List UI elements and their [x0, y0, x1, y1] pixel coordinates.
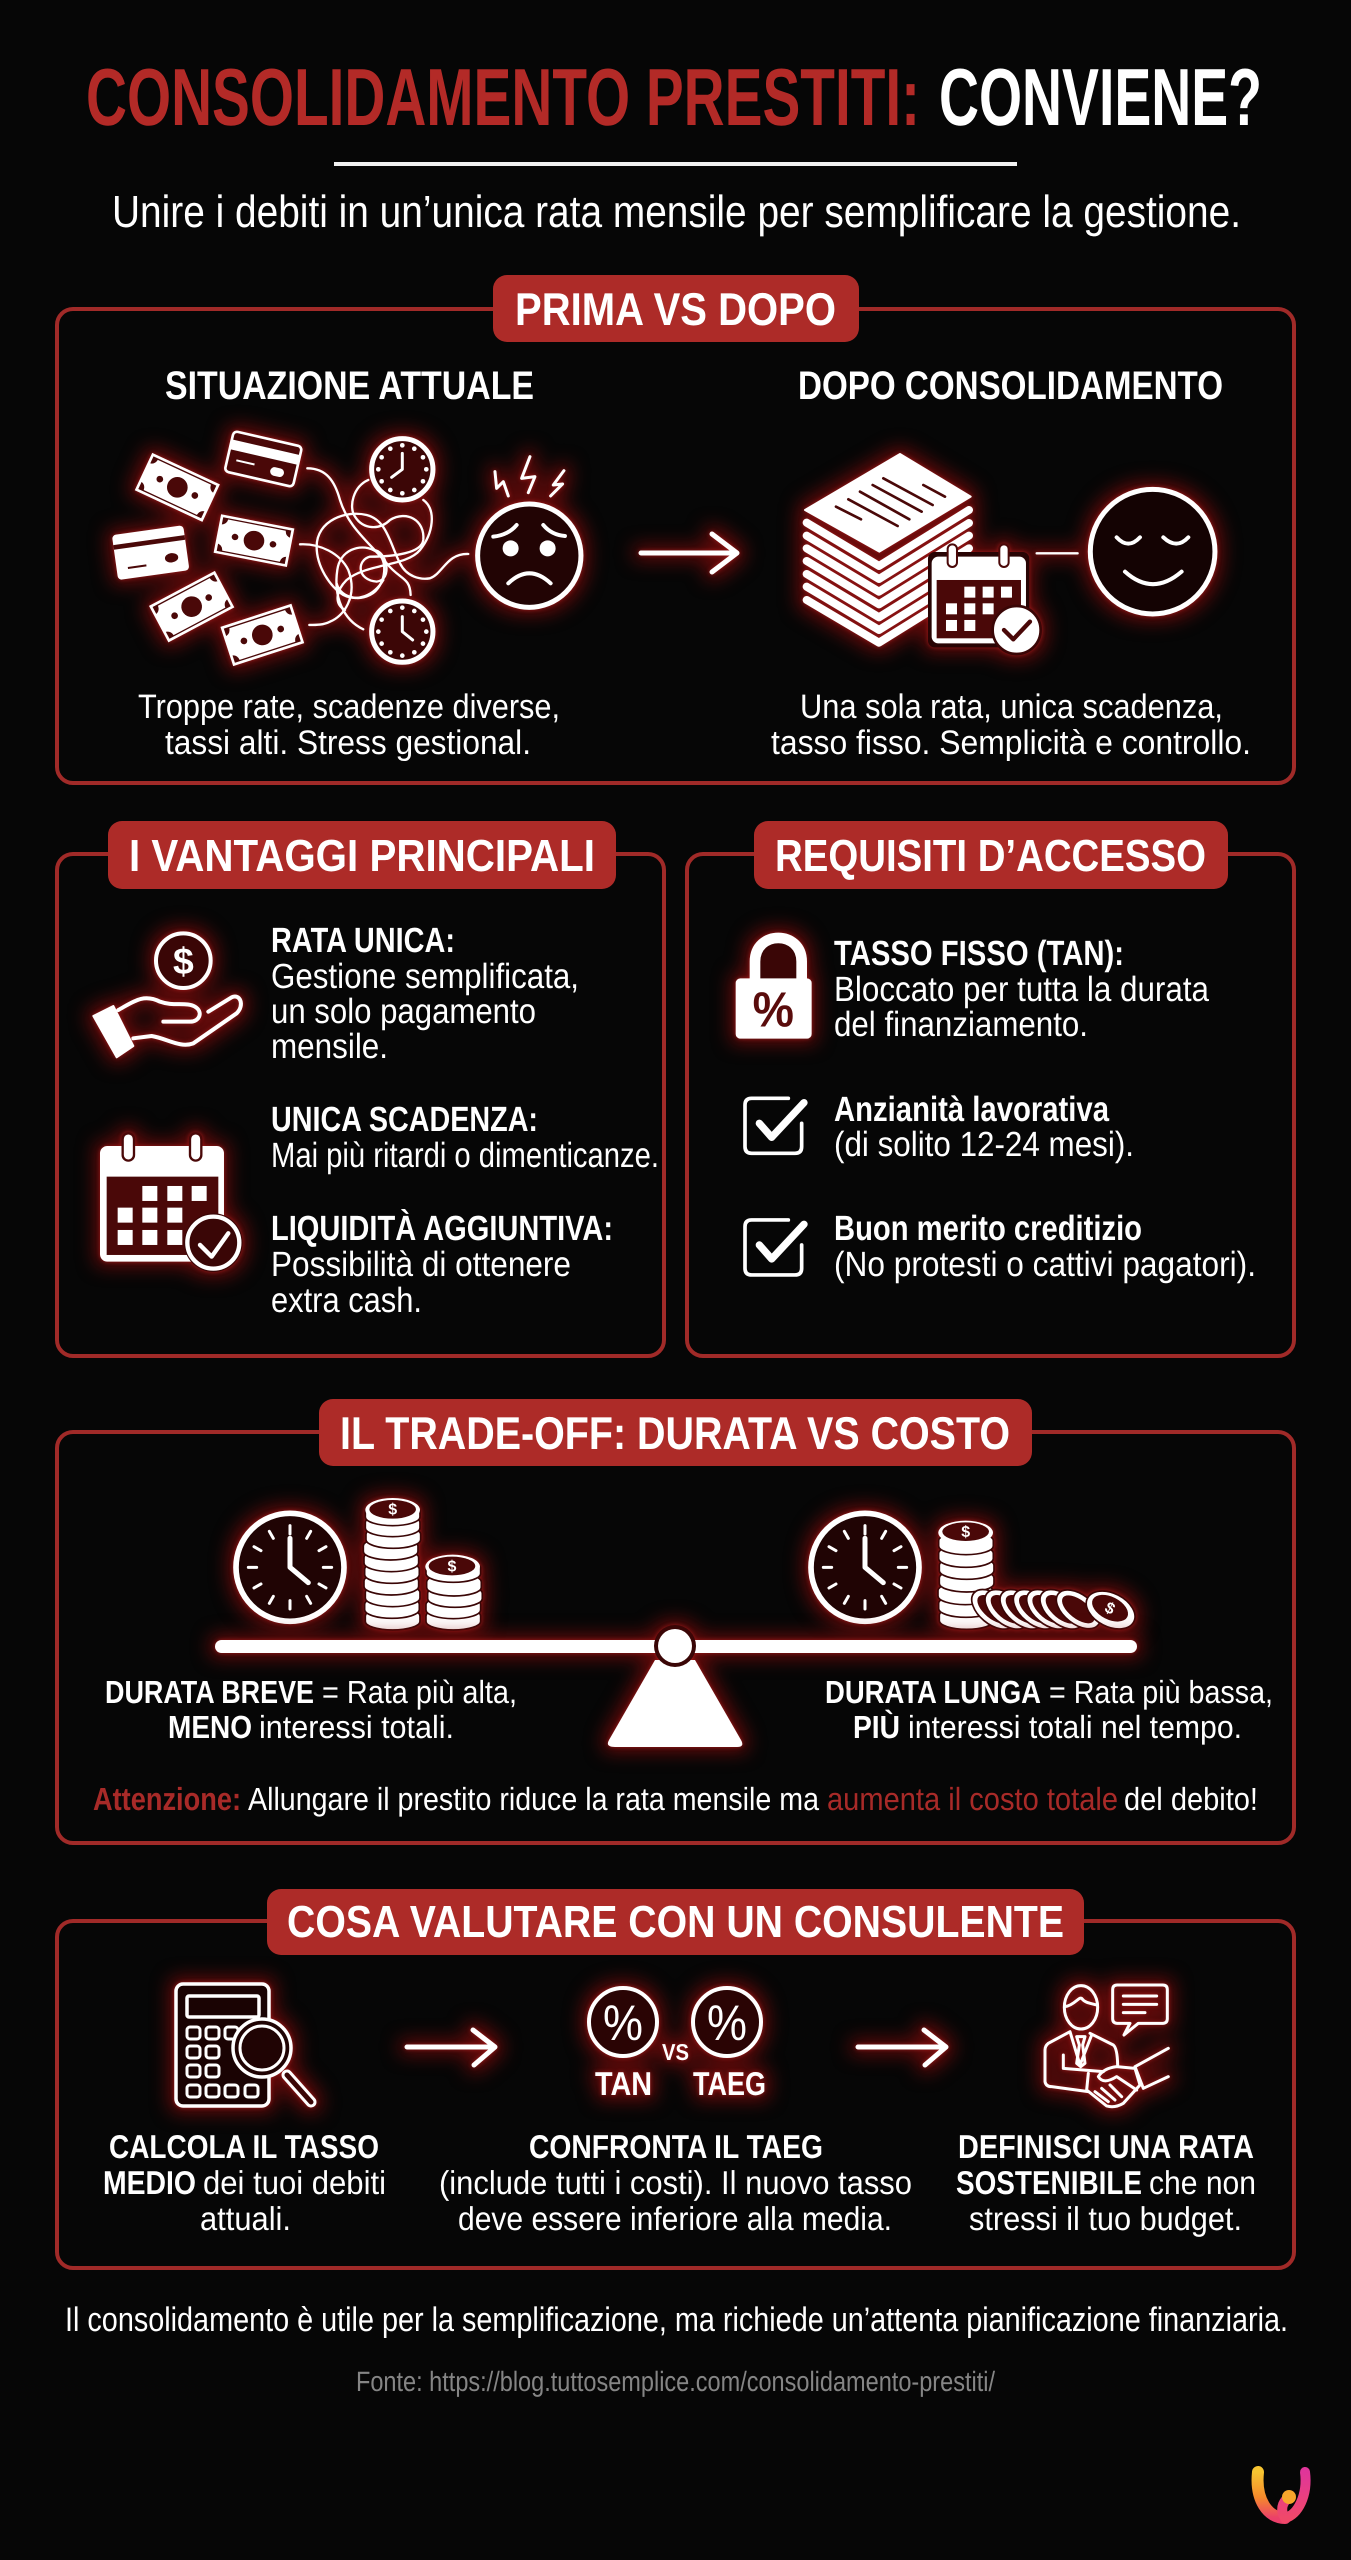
source: Fonte: https://blog.tuttosemplice.com/consolidamento-prestiti/ — [356, 2366, 995, 2397]
callout: attenzione: aumenta il costo totale — [827, 1781, 1118, 1817]
text: tasso fisso: Bloccato per tutta la durata — [834, 970, 1209, 1009]
panel: prima vs dopo — [57, 275, 1294, 783]
heading: requisiti — [754, 821, 1228, 889]
icon: logo — [1258, 2472, 1306, 2518]
heading: prima vs dopo: PRIMA VS DOPO — [515, 283, 836, 335]
icon: padlock with percent — [736, 938, 812, 1039]
icon: clock and tall coin stacks — [236, 1498, 482, 1630]
panel: vantaggi principali — [57, 821, 664, 1356]
text: durata breve: interessi totali. — [259, 1709, 454, 1745]
text: durata lunga — [825, 1674, 1273, 1745]
text: dopo consolidamento: tasso fisso. Semplicità e controllo. — [771, 724, 1251, 762]
text: definisci una rata sostenibile: SOSTENIBILE — [956, 2164, 1142, 2201]
text: situazione attuale — [138, 688, 560, 762]
icon: clock and toppled coins — [811, 1513, 1141, 1637]
text: definisci una rata sostenibile: DEFINISCI UNA RATA — [958, 2128, 1254, 2165]
panel: requisiti d'accesso — [687, 821, 1294, 1356]
text: anzianità lavorativa: (di solito 12-24 mesi). — [834, 1125, 1134, 1164]
text: calcola il tasso medio — [103, 2128, 386, 2237]
text: rata unica: Gestione semplificata, — [271, 957, 579, 996]
text: durata lunga: DURATA LUNGA — [825, 1674, 1041, 1710]
text: definisci una rata sostenibile — [956, 2128, 1256, 2237]
icon: calculator with magnifier — [176, 1984, 311, 2106]
icon: checkbox — [745, 1220, 804, 1275]
text: situazione attuale: Troppe rate, scadenze diverse, — [138, 688, 560, 726]
text: tasso fisso: del finanziamento. — [834, 1005, 1088, 1044]
text: confronta il taeg: (include tutti i costi). Il nuovo tasso — [439, 2164, 912, 2201]
text: liquidità aggiuntiva: extra cash. — [271, 1281, 422, 1320]
text: durata breve: = Rata più alta, — [322, 1674, 517, 1710]
text: durata breve: MENO — [168, 1709, 252, 1745]
text: liquidità aggiuntiva — [271, 1208, 613, 1320]
icon: clock and tall coin stacks: $ — [388, 1501, 397, 1518]
heading: trade-off — [319, 1399, 1032, 1466]
icon: checkbox — [745, 1098, 804, 1153]
arrow — [407, 2030, 495, 2065]
text: situazione attuale: tassi alti. Stress gestional. — [165, 724, 531, 762]
subheading: situazione attuale: SITUAZIONE ATTUALE — [165, 364, 534, 408]
heading: vantaggi: I VANTAGGI PRINCIPALI — [129, 830, 595, 881]
icon: tan vs taeg: TAEG — [693, 2065, 766, 2102]
text: durata breve: DURATA BREVE — [105, 1674, 314, 1710]
text: confronta il taeg: deve essere inferiore alla media. — [458, 2200, 892, 2237]
title: CONSOLIDAMENTO PRESTITI: — [86, 53, 920, 143]
text: anzianità lavorativa: Anzianità lavorativa — [834, 1090, 1109, 1129]
heading: vantaggi — [108, 821, 616, 889]
text: buon merito creditizio: (No protesti o cattivi pagatori). — [834, 1245, 1256, 1284]
text: unica scadenza: UNICA SCADENZA: — [271, 1100, 538, 1139]
text: dopo consolidamento: Una sola rata, unica scadenza, — [800, 688, 1223, 726]
icon: padlock with percent: % — [753, 982, 794, 1037]
icon: balance beam and fulcrum — [215, 1625, 1137, 1747]
icon: tan vs taeg — [589, 1988, 766, 2102]
text: liquidità aggiuntiva: Possibilità di ottenere — [271, 1245, 571, 1284]
heading: consulente: COSA VALUTARE CON UN CONSULENTE — [287, 1896, 1064, 1947]
callout: attenzione: Attenzione: — [93, 1781, 241, 1817]
text: calcola il tasso medio: dei tuoi debiti — [203, 2164, 386, 2201]
text: calcola il tasso medio: attuali. — [200, 2200, 291, 2237]
text: rata unica: un solo pagamento — [271, 992, 536, 1031]
icon: tan vs taeg: VS — [662, 2039, 689, 2065]
text: unica scadenza — [271, 1100, 659, 1175]
icon: tan vs taeg: % — [707, 1995, 747, 2051]
heading: requisiti: REQUISITI D’ACCESSO — [775, 830, 1206, 881]
text: anzianità lavorativa — [834, 1090, 1134, 1164]
text: definisci una rata sostenibile: che non — [1149, 2164, 1256, 2201]
text: definisci una rata sostenibile: stressi il tuo budget. — [969, 2200, 1242, 2237]
text: durata lunga: PIÙ — [853, 1709, 900, 1745]
icon: bills, cards, clocks and tangle leading to stressed face — [112, 431, 581, 666]
text: buon merito creditizio: Buon merito creditizio — [834, 1209, 1142, 1248]
text: tasso fisso — [834, 934, 1209, 1044]
panel: trade-off — [57, 1399, 1294, 1843]
text: rata unica: mensile. — [271, 1027, 388, 1066]
text: confronta il taeg — [439, 2128, 912, 2237]
icon: clock and toppled coins: $ — [1102, 1598, 1118, 1618]
callout: attenzione: del debito! — [1124, 1781, 1258, 1817]
subheading: dopo consolidamento: DOPO CONSOLIDAMENTO — [798, 364, 1223, 408]
heading: trade-off: IL TRADE-OFF: DURATA VS COSTO — [340, 1407, 1010, 1459]
text: calcola il tasso medio: CALCOLA IL TASSO — [109, 2128, 379, 2165]
text: liquidità aggiuntiva: LIQUIDITÀ AGGIUNTIVA: — [271, 1208, 613, 1248]
callout: attenzione — [93, 1781, 1258, 1817]
icon: paper stack with calendar and calm face — [805, 454, 1215, 654]
arrow — [641, 534, 737, 572]
text: durata breve — [105, 1674, 517, 1745]
text: durata lunga: = Rata più bassa, — [1049, 1674, 1273, 1710]
heading: prima vs dopo — [493, 275, 859, 342]
icon: hand with coin — [93, 933, 241, 1057]
arrow — [858, 2030, 946, 2065]
text: dopo consolidamento — [771, 688, 1251, 762]
text: durata lunga: interessi totali nel tempo. — [908, 1709, 1242, 1745]
text: rata unica: RATA UNICA: — [271, 921, 455, 960]
panel: cosa valutare con un consulente — [57, 1889, 1294, 2268]
text: rata unica — [271, 921, 579, 1066]
text: calcola il tasso medio: MEDIO — [103, 2164, 196, 2201]
icon: calendar with check — [100, 1133, 243, 1272]
icon: clock and tall coin stacks: $ — [448, 1557, 457, 1575]
text: unica scadenza: Mai più ritardi o dimenticanze. — [271, 1136, 659, 1175]
text: buon merito creditizio — [834, 1209, 1256, 1284]
icon: clock and toppled coins: $ — [961, 1523, 970, 1541]
text: tasso fisso: TASSO FISSO (TAN): — [834, 934, 1124, 973]
text: confronta il taeg: CONFRONTA IL TAEG — [529, 2128, 823, 2165]
icon: hand with coin: $ — [173, 940, 194, 982]
icon: tan vs taeg: TAN — [595, 2065, 652, 2102]
callout: attenzione: Allungare il prestito riduce la rata mensile ma — [248, 1781, 819, 1817]
icon: consultant with handshake — [1045, 1985, 1168, 2107]
heading: consulente — [267, 1889, 1084, 1955]
icon: tan vs taeg: % — [603, 1995, 643, 2051]
